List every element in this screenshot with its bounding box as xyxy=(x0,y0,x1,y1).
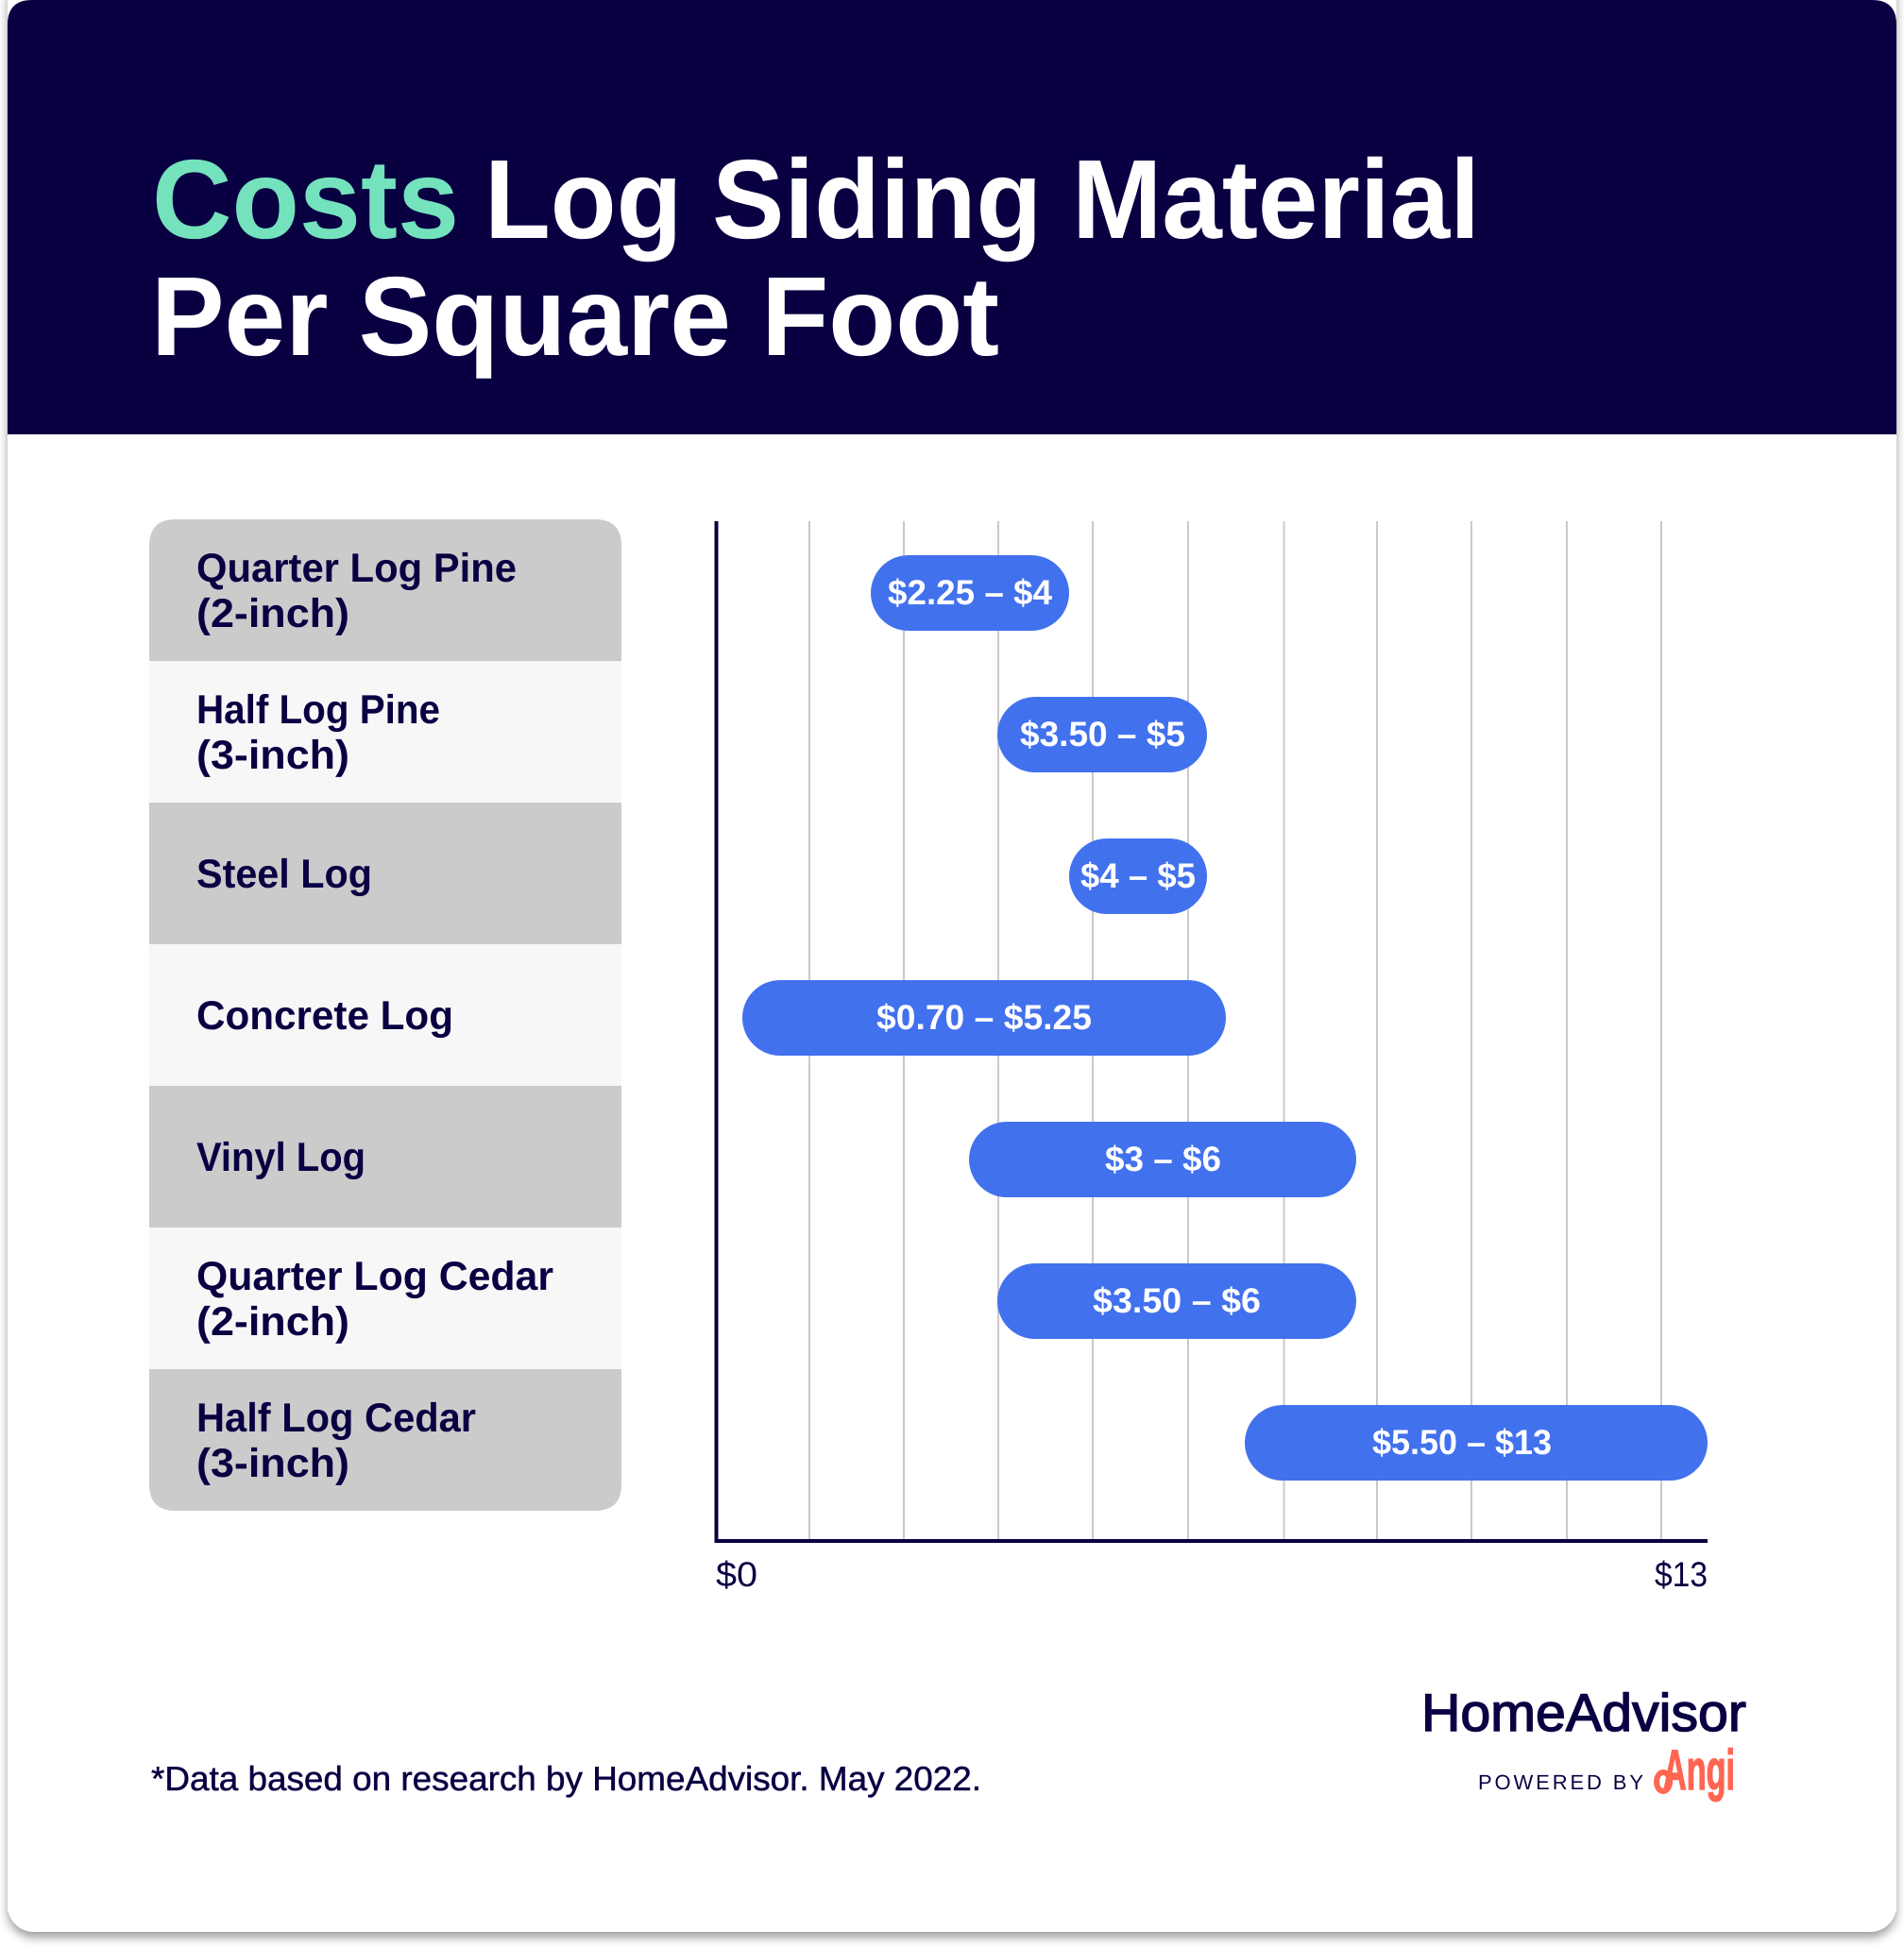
bar: Vinyl Log range: $3 – $6 xyxy=(1105,1140,1221,1178)
row: Half Log Pine: (3-inch) xyxy=(196,733,349,778)
row: Steel Log xyxy=(149,803,621,944)
header band xyxy=(8,0,1896,434)
chart axes xyxy=(716,521,1708,1541)
logo: HomeAdvisor powered by Angi xyxy=(1421,1683,1746,1802)
bar: Quarter Log Cedar range: $3.50 – $6 xyxy=(1093,1281,1261,1320)
panel: material labels table xyxy=(149,519,621,1511)
powered by: POWERED BY xyxy=(1478,1770,1643,1794)
bar: Quarter Log Cedar range xyxy=(997,1263,1356,1339)
row: Vinyl Log: Vinyl Log xyxy=(196,1135,366,1180)
title: Costs xyxy=(152,137,459,262)
row: Quarter Log Cedar xyxy=(149,1227,621,1369)
title: Log Siding Material xyxy=(484,137,1480,262)
chart: cost ranges xyxy=(716,521,1708,1594)
bar: Half Log Pine range xyxy=(997,697,1207,772)
row: Half Log Cedar xyxy=(149,1369,621,1511)
bar: Concrete Log range xyxy=(742,980,1226,1056)
icon: Angi mark: Angi xyxy=(1663,1738,1735,1802)
title: Per Square Foot xyxy=(151,254,999,380)
bar: Steel Log range xyxy=(1069,838,1207,914)
bar: Quarter Log Pine range: $2.25 – $4 xyxy=(888,573,1052,612)
row: Vinyl Log xyxy=(149,1086,621,1227)
icon: Angi mark xyxy=(1657,1738,1735,1802)
row: Steel Log: Steel Log xyxy=(196,852,372,897)
bar: Half Log Cedar range: $5.50 – $13 xyxy=(1372,1423,1552,1462)
title xyxy=(151,137,1480,380)
row: Half Log Cedar: (3-inch) xyxy=(196,1441,349,1486)
bar: Half Log Cedar range xyxy=(1245,1405,1708,1481)
row: Quarter Log Pine: (2-inch) xyxy=(196,591,349,636)
row: Concrete Log: Concrete Log xyxy=(196,993,453,1039)
footnote: *Data based on research by HomeAdvisor. May 2022. xyxy=(151,1759,981,1798)
bar: Steel Log range: $4 – $5 xyxy=(1080,856,1196,895)
row: Half Log Cedar: Half Log Cedar xyxy=(196,1396,476,1441)
bar: Half Log Pine range: $3.50 – $5 xyxy=(1020,715,1185,753)
row: Concrete Log xyxy=(149,944,621,1086)
row: Half Log Pine xyxy=(149,661,621,803)
row: Half Log Pine: Half Log Pine xyxy=(196,687,440,733)
row: Quarter Log Cedar: Quarter Log Cedar xyxy=(196,1254,553,1299)
bar: Vinyl Log range xyxy=(969,1122,1356,1197)
bar: Quarter Log Pine range xyxy=(871,555,1069,631)
axis label: $0: $0 xyxy=(716,1555,757,1594)
row: Quarter Log Cedar: (2-inch) xyxy=(196,1299,349,1345)
bar: Concrete Log range: $0.70 – $5.25 xyxy=(876,998,1092,1037)
row: Quarter Log Pine xyxy=(149,519,621,661)
axis label: $13: $13 xyxy=(1655,1555,1708,1594)
row: Quarter Log Pine: Quarter Log Pine xyxy=(196,546,517,591)
logo wordmark: HomeAdvisor xyxy=(1421,1683,1746,1742)
